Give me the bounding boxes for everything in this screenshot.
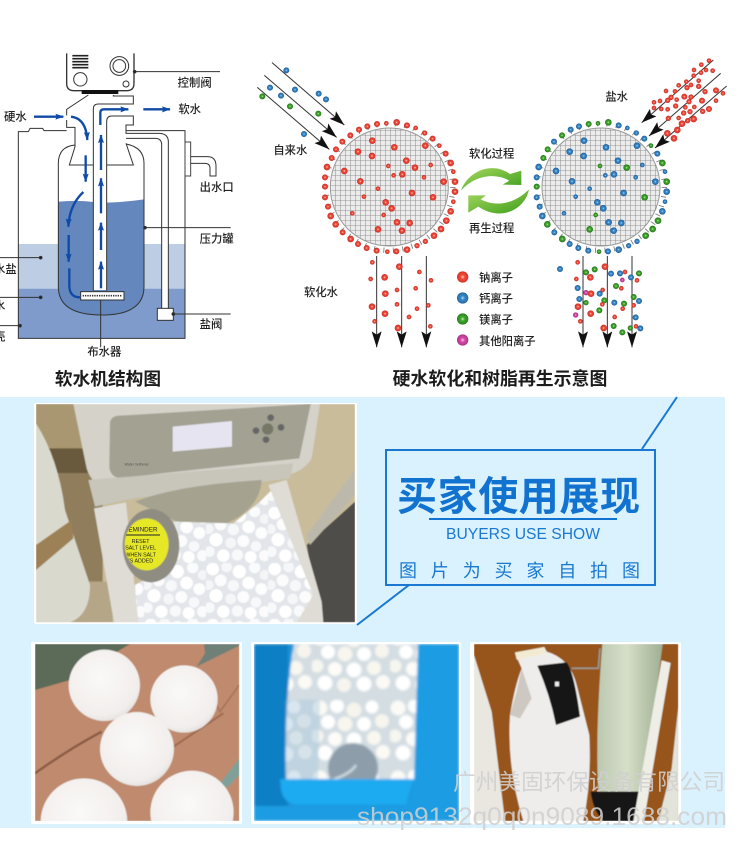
resin bead xyxy=(538,124,664,250)
photo frame: salt tank xyxy=(251,642,461,824)
diagram labels: 控制阀 xyxy=(178,75,212,89)
decorative diagonal lines xyxy=(357,397,677,625)
diagram labels: 软水 xyxy=(178,102,202,116)
pressure tank xyxy=(58,144,144,315)
resin bead xyxy=(326,124,453,250)
brine sodium ions xyxy=(652,59,725,141)
control valve xyxy=(67,53,134,94)
sodium ions inside bead xyxy=(341,138,447,234)
mixed waste ions xyxy=(557,260,643,335)
water distributor xyxy=(81,292,124,300)
photo: softener with salt drawer xyxy=(36,404,355,622)
small label on lid: SALT LEVEL xyxy=(125,546,156,552)
water flow arrows xyxy=(34,109,170,297)
valve body and pipes xyxy=(67,95,168,308)
tap water ions xyxy=(260,68,329,137)
waste water down arrows xyxy=(583,256,632,347)
labels xyxy=(273,143,514,299)
labels: 自来水 xyxy=(273,143,308,157)
small label on lid: IS ADDED xyxy=(128,559,153,565)
main title: 买家使用展现 xyxy=(397,475,640,519)
device brand text: Water Softener xyxy=(124,463,150,467)
photo frame: balls in hand xyxy=(31,642,242,824)
watermark: company name: 广州美固环保设备有限公司 xyxy=(453,769,725,795)
photo frame: softener unit xyxy=(470,642,681,824)
outer brine cabinet xyxy=(18,128,185,338)
panel: resin regeneration, right half xyxy=(534,59,727,347)
title box: buyers use show xyxy=(386,450,655,585)
legend: 钙离子 xyxy=(479,291,513,305)
diagram labels: 硬水 xyxy=(4,109,27,123)
diagram labels xyxy=(0,75,234,358)
panel: softening process, left half xyxy=(257,63,536,348)
english subtitle: BUYERS USE SHOW xyxy=(446,526,601,543)
legend: 钠离子 xyxy=(479,271,513,285)
photo frame: softener salt drawer xyxy=(34,403,357,624)
icon: green cycle arrows xyxy=(461,168,529,213)
note text: 图片为买家自拍图 xyxy=(399,561,640,581)
legend: 其他阳离子 xyxy=(479,334,536,348)
tap water arrows xyxy=(257,63,344,149)
labels: 软化过程 xyxy=(469,146,514,160)
leader lines xyxy=(0,70,231,347)
photo: softener and resin tank in cabinet xyxy=(474,644,678,821)
heading: softening and regeneration: 硬水软化和树脂再生示意图 xyxy=(393,368,607,389)
diagram labels: 盐阀 xyxy=(200,317,222,331)
soft water sodium ions xyxy=(369,260,433,331)
ions inside bead xyxy=(553,138,658,234)
sodium ions on bead surface xyxy=(322,119,458,254)
diagram labels: 出水口 xyxy=(200,180,234,194)
title underline xyxy=(429,518,617,520)
heading: softener structure: 软水机结构图 xyxy=(55,369,161,389)
small label on lid: WHEN SALT xyxy=(125,552,157,558)
salt valve xyxy=(157,308,173,320)
soft water down arrows xyxy=(377,256,426,347)
brine label: 盐水 xyxy=(605,90,629,104)
legend xyxy=(457,271,536,348)
calcium and magnesium ions on bead surface xyxy=(534,119,670,254)
salt and water layers xyxy=(18,244,185,338)
panel: buyers show background xyxy=(0,397,725,828)
small label on lid: REMINDER xyxy=(124,527,158,534)
photo: salt tablets in blue tank xyxy=(254,644,459,821)
labels: 软化水 xyxy=(304,285,339,299)
watermark: shop url: shop9132q0q0n9089.1688.com xyxy=(357,803,727,831)
panel: softener structure diagram xyxy=(0,53,234,358)
small label on lid: RESET xyxy=(132,539,150,545)
labels: 再生过程 xyxy=(469,221,514,235)
diagram labels: 压力罐 xyxy=(200,232,234,246)
outlet pipe xyxy=(185,142,216,176)
small label on lid xyxy=(126,527,160,562)
brine arrows xyxy=(642,60,727,148)
photo: salt balls in hand xyxy=(35,644,240,821)
legend: 镁离子 xyxy=(479,313,513,327)
diagram labels: 布水器 xyxy=(87,344,122,358)
